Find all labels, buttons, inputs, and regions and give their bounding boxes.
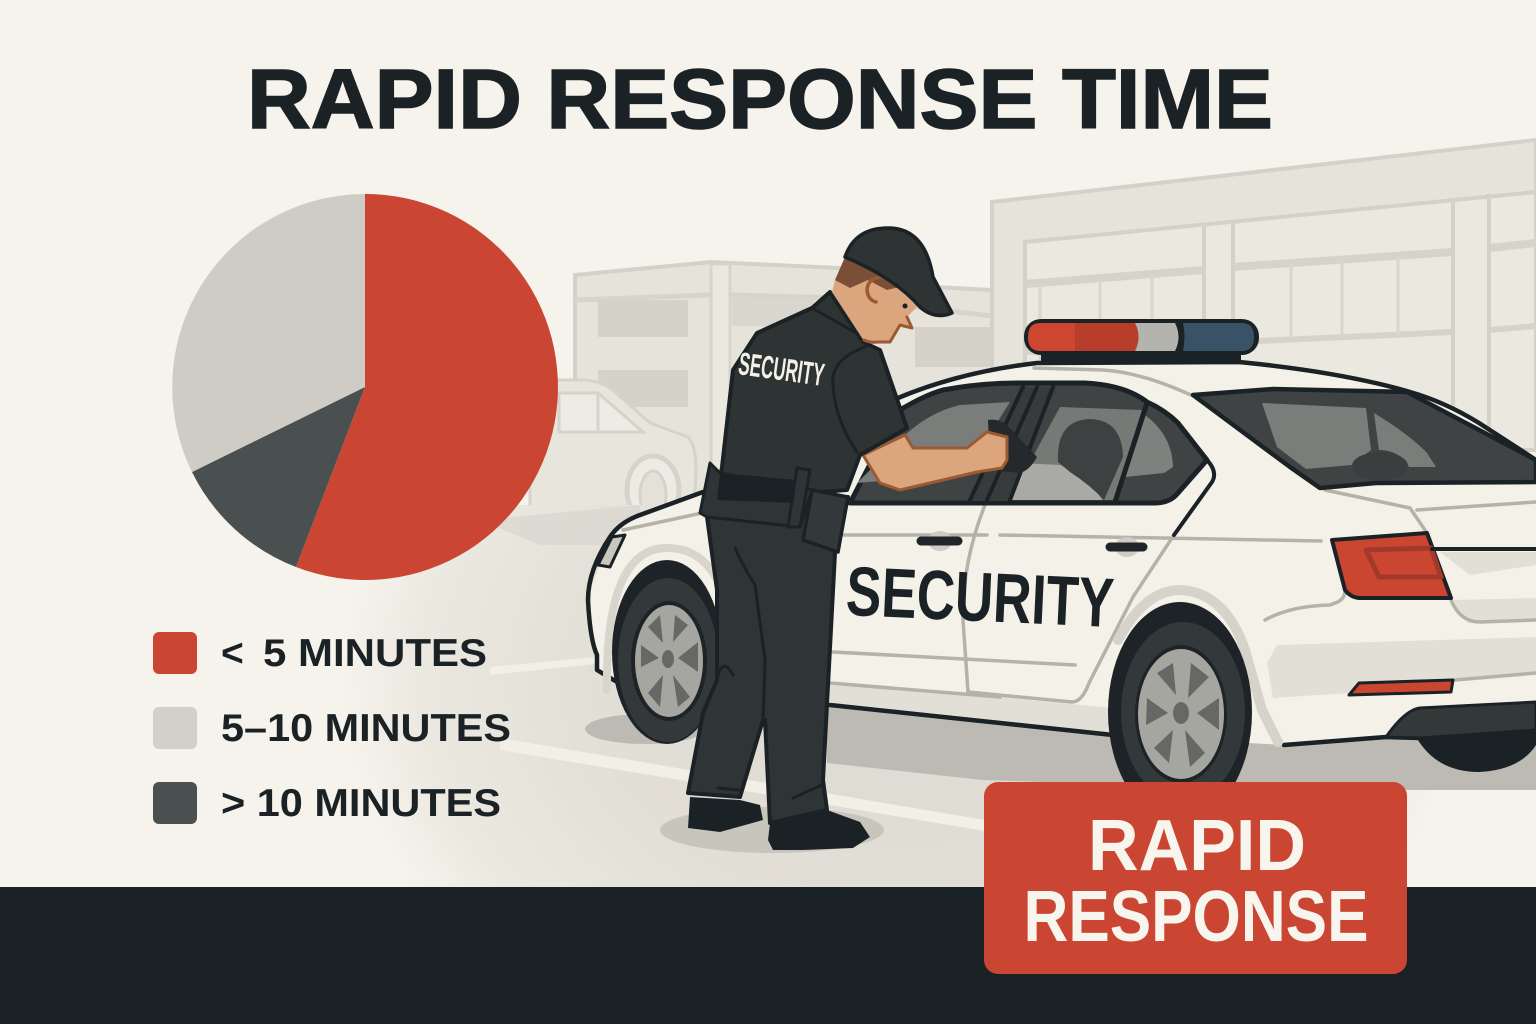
officer belt	[700, 463, 848, 552]
background parked car	[530, 380, 696, 524]
quarter pane	[1125, 415, 1173, 477]
road stripe	[500, 738, 985, 831]
light bar	[1024, 319, 1259, 362]
slice: 5 to 10 minutes	[172, 194, 365, 472]
officer arm	[863, 420, 1037, 490]
trunk panel shading	[1440, 552, 1536, 623]
officer legs	[688, 490, 848, 823]
pie chart	[172, 194, 558, 580]
legend	[153, 632, 511, 825]
front wheel	[607, 548, 725, 744]
title: RAPID RESPONSE TIME	[247, 52, 1273, 146]
rear window	[1193, 389, 1536, 488]
right building	[992, 140, 1536, 450]
sill shading	[830, 683, 1113, 735]
headlight	[598, 535, 625, 567]
door handles	[928, 531, 952, 551]
side marker	[1349, 680, 1453, 695]
legend item: less than 5	[153, 632, 487, 675]
rapid response badge	[984, 782, 1407, 974]
legend item: over 10: > 10 MINUTES	[221, 782, 501, 825]
headrest	[1058, 419, 1123, 500]
slice: over 10 minutes	[192, 387, 365, 567]
legend item: 5 to 10: 5–10 MINUTES	[221, 707, 511, 750]
slice: less than 5 minutes	[296, 194, 558, 580]
officer ear	[867, 277, 881, 302]
left building	[575, 262, 992, 500]
rear valance	[1386, 702, 1536, 738]
rapid response badge: RESPONSE	[1024, 877, 1368, 957]
officer torso	[717, 292, 907, 500]
tail light	[1332, 533, 1536, 598]
sleeve seam	[812, 292, 865, 452]
boots shadow	[660, 807, 884, 853]
background buildings	[575, 140, 1536, 500]
body grey lines	[623, 368, 1536, 702]
rear wheel	[1108, 590, 1278, 822]
bottom band	[0, 887, 1536, 1024]
front window pane	[857, 402, 1010, 483]
officer boots	[688, 797, 870, 850]
rear door edge	[1174, 460, 1214, 535]
rear door pane	[1009, 407, 1142, 500]
side windows	[850, 383, 1207, 503]
door pillar strips	[970, 387, 1056, 501]
pillar	[1115, 403, 1147, 502]
rapid response badge: RAPID	[1088, 806, 1306, 886]
officer eye	[902, 304, 908, 308]
officer shirt lettering: SECURITY	[736, 345, 827, 393]
officer hair	[835, 257, 908, 290]
officer cap	[845, 228, 952, 315]
far rear wheel	[1415, 725, 1536, 772]
legend item: less than 5: <	[221, 632, 244, 675]
car shadow	[827, 705, 1536, 790]
car body	[588, 362, 1536, 745]
security officer	[688, 228, 1037, 850]
ground	[340, 505, 1536, 887]
door lettering: SECURITY	[844, 552, 1116, 642]
object in hand	[988, 420, 1037, 473]
officer head	[832, 228, 952, 342]
bumper panel	[1267, 637, 1536, 698]
legend item: less than 5: 5 MINUTES	[263, 632, 487, 675]
outline strokes	[588, 362, 1536, 745]
security car	[588, 319, 1536, 822]
